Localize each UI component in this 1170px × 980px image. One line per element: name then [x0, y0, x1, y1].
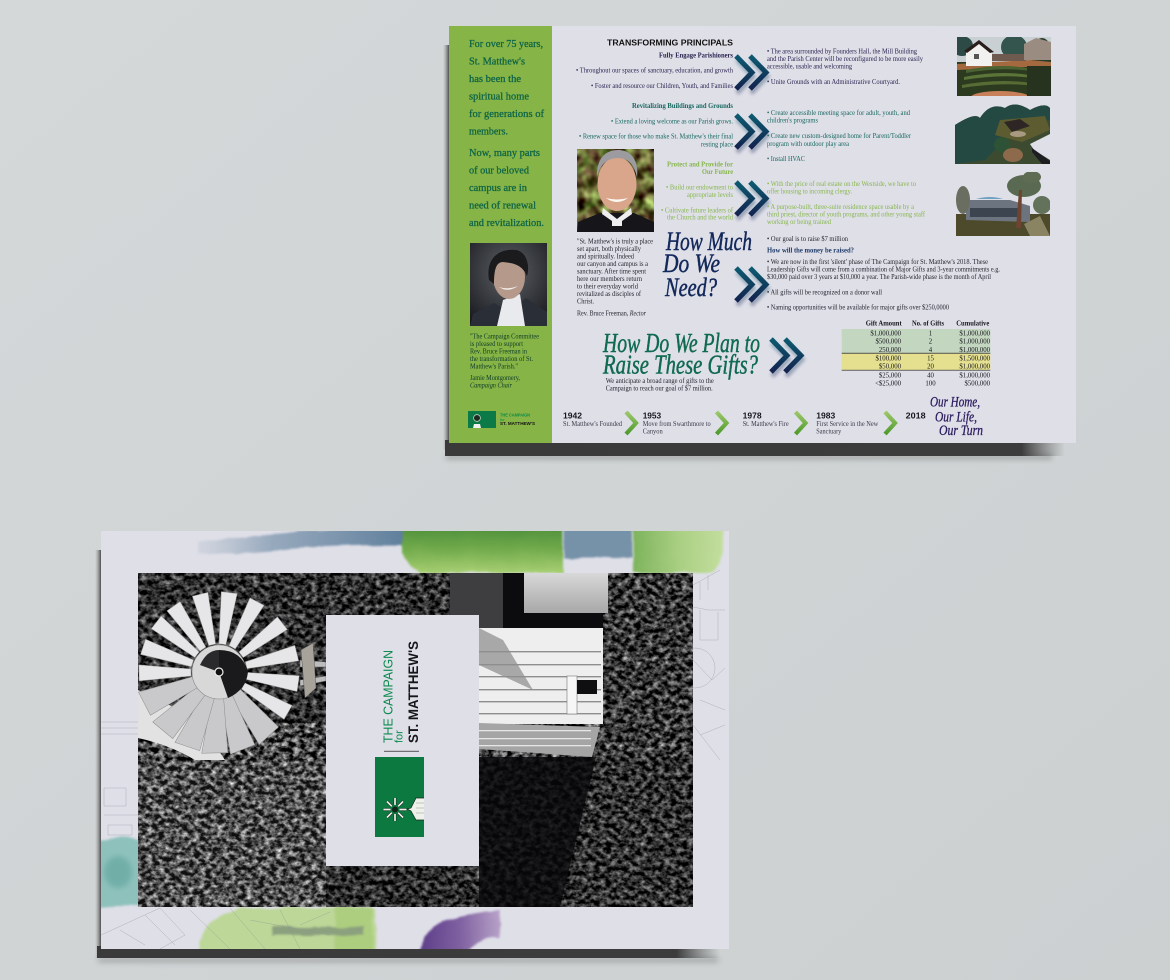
title: the campaign for st matthews: THE CAMPAIGN — [380, 650, 396, 743]
text block: project details teal: children's programs — [767, 118, 818, 125]
plan drawing: left and bottom — [101, 722, 330, 949]
quote: rector: "St. Matthew's is truly a place — [577, 238, 653, 245]
text block: project details green: working or being trained — [767, 219, 832, 226]
heading: how much do we need: Do We — [662, 249, 720, 278]
text block: goal and how money is raised — [767, 236, 1000, 312]
text block: fully engage parishioners: • Foster and resource our Children, Youth, and Families — [591, 83, 733, 90]
table: gift chart: $500,000 — [964, 380, 991, 387]
windmill — [138, 592, 326, 755]
table: gift chart: $1,000,000 — [870, 330, 902, 337]
plan drawing: right — [693, 570, 725, 760]
quote: rector: sanctuary. After time spent — [577, 269, 646, 276]
photo: windmill and house in black and white — [138, 573, 693, 907]
watercolor: gray smudge — [272, 927, 364, 935]
timeline: 1983: Sanctuary — [816, 428, 842, 435]
title: the campaign for st matthews: for — [394, 730, 406, 743]
table: gift chart: 250,000 — [879, 347, 902, 354]
timeline: 1953 — [643, 410, 711, 435]
house — [450, 573, 608, 757]
arrow: double chevron 4 — [736, 268, 767, 305]
scene image 1: amphitheater rendering — [957, 37, 1051, 96]
text block: goal and how money is raised: $30,000 paid over 3 years at $10,000 a year. The Parish-wide phase is the month of April — [767, 274, 991, 281]
quote: campaign committee: "The Campaign Committee — [470, 333, 539, 340]
text block: revitalizing buildings and grounds — [579, 103, 733, 149]
scene image 3: residence rendering — [956, 171, 1051, 236]
quote: rector — [577, 238, 653, 317]
text block: project details navy: and the Parish Center will be reconfigured to be more easily — [767, 56, 924, 63]
table: gift chart: 1 — [929, 330, 932, 337]
text block: revitalizing buildings and grounds: • Renew space for those who make St. Matthew's their final — [579, 134, 733, 141]
text block: project details teal: • Install HVAC — [767, 156, 805, 163]
text block: fully engage parishioners: Fully Engage Parishioners — [659, 52, 733, 59]
arrow: double chevron 3 — [736, 182, 767, 219]
table: gift chart: 20 — [927, 364, 934, 371]
sidebar intro text: spiritual home — [469, 90, 529, 102]
arrow: double chevron 2 — [736, 115, 767, 152]
card: cover title — [326, 615, 479, 866]
text block: fully engage parishioners — [576, 52, 734, 90]
title: the campaign for st matthews — [380, 641, 421, 743]
tagline: our home our life our turn: Our Home, — [930, 395, 980, 411]
watercolor: bottom green wash — [200, 908, 376, 955]
windmill tail — [300, 643, 326, 698]
sheet shadow — [443, 45, 1065, 459]
table: gift chart: Gift Amount — [866, 320, 902, 327]
text block: protect and provide: the Church and the world — [667, 215, 734, 222]
quote: rector: Christ. — [577, 299, 594, 306]
table: gift chart: 100 — [925, 380, 936, 387]
heading: transforming principals: TRANSFORMING PRINCIPALS — [607, 38, 734, 48]
sheet paper — [101, 531, 729, 949]
text block: revitalizing buildings and grounds: • Extend a loving welcome as our Parish grows. — [611, 118, 733, 125]
text block: project details navy: • The area surrounded by Founders Hall, the Mill Building — [767, 48, 918, 55]
text block: project details teal: • Create new custom-designed home for Parent/Toddler — [767, 133, 912, 140]
text block: fully engage parishioners: • Throughout our spaces of sanctuary, education, and growth — [576, 68, 734, 74]
sidebar intro text: for generations of — [469, 108, 544, 120]
table: gift chart: 40 — [927, 372, 934, 379]
heading: how much do we need: How Much — [665, 227, 752, 256]
text block: goal and how money is raised: • Our goal is to raise $7 million — [767, 236, 849, 243]
table: gift chart: 4 — [929, 347, 933, 354]
quote: rector: set apart, both physically — [577, 246, 642, 253]
sidebar intro text: For over 75 years, — [469, 38, 543, 50]
arrow: timeline chevron 4 — [885, 412, 895, 434]
heading: how do we plan to raise these gifts: How Do We Plan to — [602, 328, 760, 358]
text block: gifts intro: Campaign to reach our goal of $7 million. — [606, 386, 713, 393]
text block: project details teal: • Create accessible meeting space for adult, youth, and — [767, 110, 911, 117]
table: gift chart: 2 — [929, 339, 933, 346]
heading: how do we plan to raise these gifts: Raise These Gifts? — [602, 350, 758, 380]
timeline — [563, 410, 926, 435]
quote: rector: here our members return — [577, 276, 643, 283]
timeline: 1953: Canyon — [643, 428, 663, 435]
arrow: timeline chevron 1 — [626, 412, 636, 434]
watercolor: teal wash — [101, 836, 138, 909]
text block: goal and how money is raised: • All gifts will be recognized on a donor wall — [767, 289, 882, 296]
tagline: our home our life our turn — [930, 395, 983, 439]
text block: goal and how money is raised: • Naming opportunities will be available for major gifts over $250,0000 — [767, 305, 950, 312]
text block: protect and provide: appropriate levels — [687, 192, 733, 199]
text block: protect and provide — [661, 161, 734, 222]
photo: campaign chair portrait — [470, 243, 547, 326]
text block: project details green — [767, 181, 926, 226]
watercolor: right blue wash — [564, 527, 632, 558]
text block: project details green: third priest, director of youth programs, and other young staff — [767, 212, 926, 219]
text block: goal and how money is raised: How will the money be raised? — [767, 248, 854, 255]
table: gift chart: $1,000,000 — [959, 364, 991, 371]
watercolor: top green wash — [402, 527, 563, 573]
text block: protect and provide: • Cultivate future leaders of — [661, 207, 734, 214]
light sky patch — [138, 690, 225, 760]
sheet paper — [449, 26, 1076, 443]
sidebar intro text: members. — [469, 126, 508, 138]
logo: green windmill mark — [375, 757, 426, 837]
table: gift chart: <$25,000 — [875, 380, 902, 387]
sidebar intro text: need of renewal — [469, 200, 536, 212]
timeline: 1942 — [563, 410, 623, 428]
table: gift chart: $1,000,000 — [959, 339, 991, 346]
timeline: 1978: St. Matthew's Fire — [743, 421, 789, 428]
text block: protect and provide: Our Future — [702, 169, 733, 176]
timeline: 1983: 1983 — [816, 410, 836, 420]
sidebar intro text: campus are in — [469, 182, 527, 194]
sidebar intro text: St. Matthew's — [469, 56, 525, 68]
timeline: 1942: St. Matthew's Founded — [563, 421, 623, 428]
panel: inside brochure sheet — [443, 26, 1076, 459]
table: gift chart: $500,000 — [876, 339, 902, 346]
heading: how do we plan to raise these gifts — [602, 328, 760, 380]
quote: campaign committee: Rev. Bruce Freeman in — [470, 348, 528, 355]
text block: goal and how money is raised: Leadership Gifts will come from a combination of Major Gifts and 3-year commitments e.g. — [767, 266, 1000, 273]
scene image 2: campus aerial rendering — [955, 103, 1050, 164]
arrow: timeline chevron 3 — [796, 412, 806, 434]
text block: project details navy — [767, 48, 924, 86]
text block: project details green: • A purpose-built, three-suite residence space usable by a — [767, 204, 914, 211]
quote: rector: our canyon and campus is a — [577, 261, 648, 268]
table: gift chart: 15 — [927, 355, 934, 362]
quote: campaign committee: Matthew's Parish." — [470, 364, 518, 370]
table: gift chart: $50,000 — [879, 364, 902, 371]
watercolor: top blue wash — [198, 528, 405, 554]
timeline: 1942: 1942 — [563, 410, 582, 420]
table: gift chart: $1,000,000 — [959, 330, 991, 337]
watercolor: purple wash — [418, 910, 500, 955]
logo: small campaign mark — [468, 411, 535, 428]
quote: rector: and spiritually. Indeed — [577, 253, 635, 260]
text block: protect and provide: Protect and Provide for — [667, 161, 733, 168]
text block: protect and provide: • Build our endowment to — [666, 184, 734, 191]
panel: green sidebar — [449, 26, 552, 443]
text block: project details navy: accessible, usable and welcoming — [767, 64, 853, 71]
arrow: double chevron 5 — [771, 339, 802, 376]
quote: rector: Rev. Bruce Freeman, Rector — [577, 310, 646, 317]
quote: campaign committee: the transformation of St. — [470, 356, 533, 363]
text block: gifts intro — [606, 378, 714, 393]
heading: how much do we need — [662, 227, 752, 302]
watercolor and plan decoration — [97, 527, 725, 955]
sidebar intro text: has been the — [469, 73, 521, 85]
quote: rector: revitalized as disciples of — [577, 291, 642, 298]
timeline: 1953: Move from Swarthmore to — [643, 421, 711, 428]
sidebar intro text: of our beloved — [469, 164, 529, 176]
quote: campaign committee: Jamie Montgomery, — [470, 375, 520, 382]
timeline: 2018: 2018 — [906, 410, 926, 420]
panel: cover brochure sheet — [95, 527, 729, 962]
logo: small campaign mark: for — [500, 417, 505, 422]
table: gift chart: $1,500,000 — [959, 355, 991, 362]
text block: project details green: • With the price of real estate on the Westside, we have to — [767, 181, 917, 188]
text block: revitalizing buildings and grounds: resting place — [701, 142, 733, 149]
table: gift chart: $1,000,000 — [959, 372, 991, 379]
logo: small campaign mark: ST. MATTHEW'S — [500, 421, 535, 426]
text block: project details green: offer housing to incoming clergy. — [767, 189, 852, 196]
photo: rector portrait — [577, 149, 654, 232]
timeline: 1983 — [816, 410, 878, 435]
text block: gifts intro: We anticipate a broad range of gifts to the — [606, 378, 714, 385]
table: gift chart — [842, 320, 991, 387]
logo: small campaign mark: THE CAMPAIGN — [500, 412, 530, 417]
table: gift chart: No. of Gifts — [912, 320, 944, 327]
text block: goal and how money is raised: • We are now in the first 'silent' phase of The Campaign for St. Matthew's 2018. These — [767, 259, 988, 266]
quote: campaign committee: Campaign Chair — [470, 383, 512, 390]
table: gift chart: $25,000 — [879, 372, 902, 379]
timeline: 1953: 1953 — [643, 410, 661, 420]
arrow: timeline chevron 2 — [716, 412, 726, 434]
table: gift chart: Cumulative — [956, 320, 989, 327]
text block: project details teal — [767, 110, 912, 163]
table: gift chart: $100,000 — [876, 355, 902, 362]
text block: project details navy: • Unite Grounds with an Administrative Courtyard. — [767, 79, 900, 86]
timeline: 1983: First Service in the New — [816, 421, 878, 428]
sheet shadow — [95, 550, 720, 962]
table: gift chart: $1,000,000 — [959, 347, 991, 354]
text block: project details teal: program with outdoor play area — [767, 141, 849, 148]
text block: revitalizing buildings and grounds: Revitalizing Buildings and Grounds — [632, 103, 733, 110]
watercolor: right green wash — [633, 527, 724, 573]
quote: rector: to their everyday world — [577, 284, 639, 291]
quote: campaign committee: is pleased to support — [470, 341, 523, 348]
sidebar intro text — [469, 38, 544, 229]
title: the campaign for st matthews: ST. MATTHEW'S — [406, 641, 421, 743]
tagline: our home our life our turn: Our Turn — [939, 423, 983, 439]
sidebar intro text: and revitalization. — [469, 217, 544, 229]
timeline: 1978: 1978 — [743, 410, 762, 420]
quote: campaign committee — [470, 333, 539, 390]
sidebar intro text: Now, many parts — [469, 147, 540, 159]
heading: how much do we need: Need? — [664, 273, 717, 302]
timeline: 1978 — [743, 410, 789, 428]
tagline: our home our life our turn: Our Life, — [935, 410, 977, 426]
arrow: double chevron 1 — [736, 56, 767, 93]
dark foliage tint — [138, 573, 693, 907]
